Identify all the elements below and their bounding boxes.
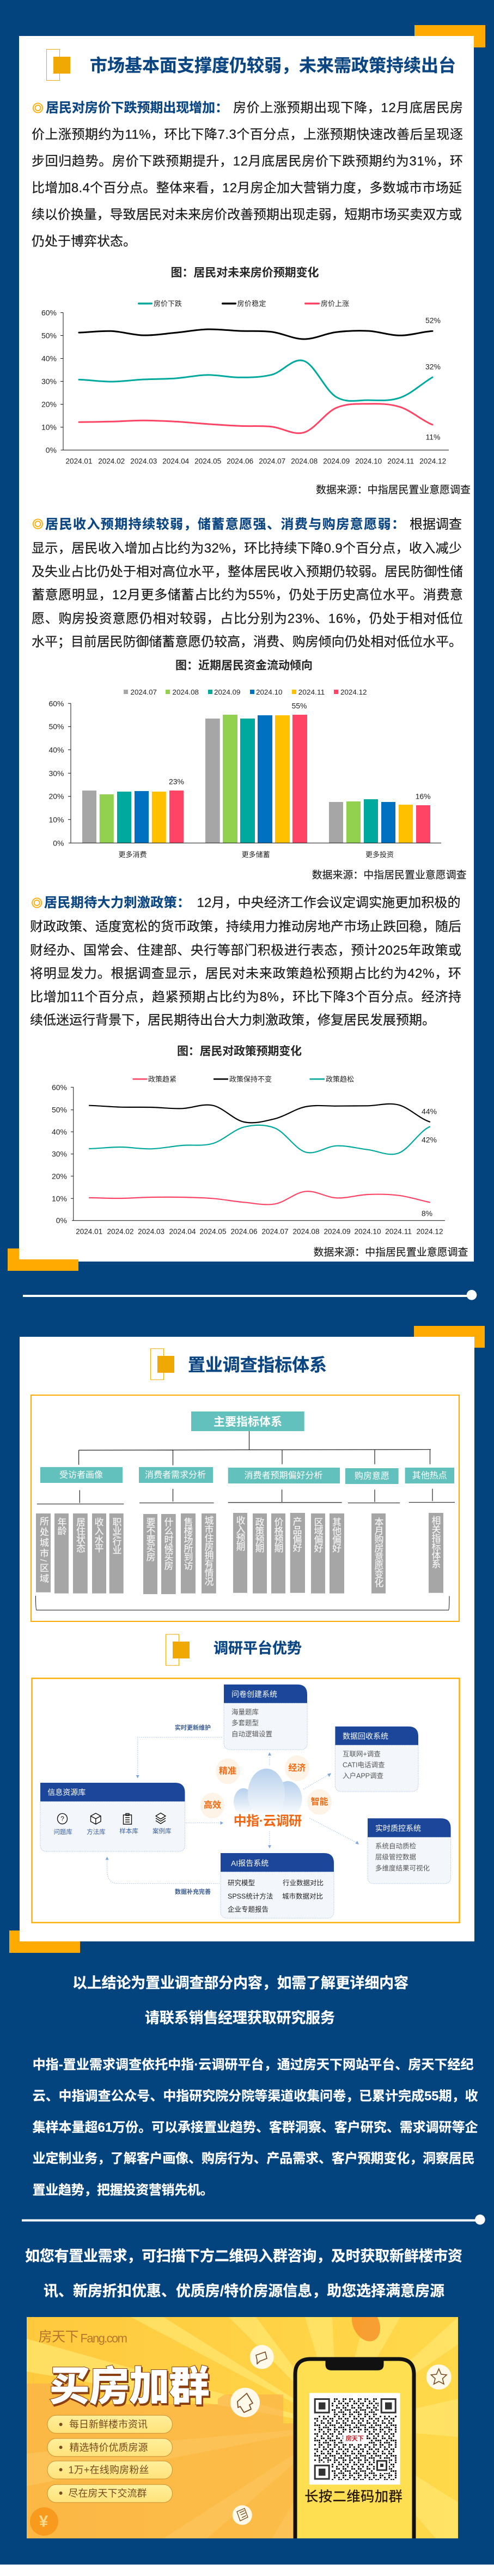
panel: platform diagram <box>32 1678 460 1922</box>
legend: 2024.07 <box>131 688 157 696</box>
callout: contact sales: 以上结论为置业调查部分内容，如需了解更详细内容 <box>72 1975 408 1992</box>
indicator bars: expectations and preferences <box>233 1513 344 1594</box>
bars: more investment <box>329 799 430 843</box>
line chart: policy expectations: 2024.03 <box>138 1227 164 1235</box>
bars: more savings <box>205 715 307 843</box>
pill: discounted homes <box>47 2439 172 2457</box>
line chart: house price expectations: 2024.11 <box>387 457 414 466</box>
card: data collection system: 入户APP调查 <box>343 1772 384 1780</box>
line chart: house price expectations: 10% <box>41 423 57 432</box>
arrow: questionnaire to library <box>136 1738 222 1778</box>
icon: star <box>426 2364 452 2390</box>
card: questionnaire system: 多套题型 <box>231 1718 259 1727</box>
icon: house <box>230 2388 260 2417</box>
logo: Fang.com <box>81 2331 127 2345</box>
card: information library: 案例库 <box>153 1827 172 1835</box>
icon: cloud <box>234 1769 302 1819</box>
line chart: policy expectations: 10% <box>52 1194 67 1203</box>
card: quality control system: 多维度结果可视化 <box>375 1864 430 1872</box>
indicator bars: expectations and preferences: 收入预期 <box>234 1516 245 1551</box>
indicator bars: demand analysis: 城市住房拥有情况 <box>203 1516 214 1586</box>
arrow: cloud to quality control <box>309 1818 359 1844</box>
panel: indicator tree <box>31 1395 459 1621</box>
background rays <box>27 2317 458 2538</box>
line chart: policy expectations: 2024.11 <box>385 1227 412 1235</box>
pill: daily news <box>47 2415 172 2433</box>
bar chart: fund flow: 10% <box>48 815 64 824</box>
label: realtime update: 实时更新维护 <box>175 1723 211 1731</box>
text block: policy stimulus: 续低迷运行背景下，居民期待出台大力刺激政策，修复居民发展预期。 <box>30 1013 435 1028</box>
text block: house price expectations: 仍处于博弈状态。 <box>32 234 136 249</box>
pill: daily news: 每日新鲜楼市资讯 <box>69 2419 148 2430</box>
card: questionnaire system <box>224 1685 307 1749</box>
root node <box>191 1411 304 1431</box>
text block: policy stimulus: 财经办、国常会、住建部、央行等部门积极进行表态，预计2025年政策或 <box>30 943 461 958</box>
text block: policy stimulus: 比增加11个百分点，趋紧预期占比约为8%，环比下降3个百分点。经济持 <box>30 990 461 1004</box>
category: respondent profile <box>40 1467 123 1483</box>
category: demand analysis: 消费者需求分析 <box>145 1470 206 1480</box>
line chart: policy expectations: 2024.04 <box>169 1227 196 1235</box>
text block: house price expectations: 步回归趋势。房价下跌预期提升，12月底居民房价下跌预期约为31%，环 <box>32 154 463 169</box>
legend: 政策保持不变 <box>229 1075 272 1083</box>
text block: service intro: 集样本量超61万份。可以承接置业趋势、客群洞察、客户研究、需求调研等企 <box>33 2120 478 2135</box>
bubble: economical: 经济 <box>288 1763 306 1773</box>
building silhouettes <box>27 2384 294 2538</box>
QR code: 房天下 <box>345 2434 364 2442</box>
card: data collection system: CATI电话调查 <box>343 1761 385 1769</box>
card: data collection system: 数据回收系统 <box>343 1732 388 1740</box>
legend: 2024.09 <box>214 688 241 696</box>
phone <box>295 2359 414 2546</box>
legend <box>138 300 349 307</box>
line chart: house price expectations: 40% <box>41 354 57 363</box>
logo <box>39 2330 127 2345</box>
indicator bars: expectations and preferences: 区域偏好 <box>313 1517 323 1553</box>
line chart: policy expectations: 8% <box>422 1209 432 1217</box>
chart title: fund flow: 图：近期居民资金流动倾向 <box>175 659 313 672</box>
line chart: policy expectations: 20% <box>52 1172 67 1180</box>
line chart: policy expectations: 60% <box>52 1083 67 1091</box>
category: expectations and preferences <box>228 1468 340 1483</box>
indicator bar: other hotspots <box>429 1513 443 1593</box>
indicator bars: demand analysis: 什么时候买房 <box>162 1517 173 1570</box>
label: data supplement: 数据补充完善 <box>175 1887 211 1895</box>
line chart: house price expectations: 2024.06 <box>227 457 253 466</box>
indicator bars: demand analysis: 售楼场所到访 <box>182 1517 193 1570</box>
icon: sample clipboard <box>123 1813 132 1824</box>
indicator bars: expectations and preferences: 产品偏好 <box>291 1517 302 1552</box>
line chart: policy expectations: 30% <box>52 1150 67 1159</box>
line chart: policy expectations: 50% <box>52 1106 67 1114</box>
line chart: house price expectations: 30% <box>41 377 57 386</box>
line chart: policy expectations: 2024.10 <box>354 1227 381 1235</box>
arrow: cloud to data collection <box>303 1773 331 1789</box>
subheading: 居民期待大力刺激政策： <box>44 895 190 910</box>
source note: 数据来源：中指居民置业意愿调查 <box>312 869 467 881</box>
bar chart: fund flow: 更多储蓄 <box>242 850 270 859</box>
panel: market fundamentals <box>8 25 485 1271</box>
heading: platform advantages: 调研平台优势 <box>214 1639 302 1656</box>
bar chart: fund flow: 50% <box>48 722 64 731</box>
title: 市场基本面支撑度仍较弱，未来需政策持续出台 <box>90 56 456 75</box>
bubble: efficient <box>200 1793 224 1818</box>
indicator bars: respondent profile: 居住状态 <box>75 1517 85 1553</box>
panel: survey system <box>9 1326 485 1953</box>
logo: 房天下 <box>39 2330 79 2345</box>
line chart: policy expectations: 0% <box>56 1216 67 1225</box>
QR code <box>309 2393 400 2484</box>
legend: 2024.10 <box>256 688 282 696</box>
card: AI report system: SPSS统计方法 <box>228 1892 273 1900</box>
legend: 政策趋松 <box>326 1075 354 1083</box>
banner heading: 买房加群 <box>49 2363 210 2409</box>
bar chart: fund flow: 16% <box>416 792 431 800</box>
arrow: cloud to questionnaire <box>268 1752 271 1765</box>
source note: 数据来源：中指居民置业意愿调查 <box>316 484 471 496</box>
pill: online fans: 1万+在线购房粉丝 <box>69 2464 149 2475</box>
card: AI report system: 研究模型 <box>228 1879 255 1887</box>
line chart: policy expectations: 2024.06 <box>231 1227 258 1235</box>
icon: title marker <box>166 1634 190 1666</box>
indicator bars: expectations and preferences: 其他偏好 <box>331 1517 341 1553</box>
bar chart: fund flow: 55% <box>291 701 307 710</box>
legend: 2024.08 <box>172 688 199 696</box>
line chart: policy expectations: 2024.02 <box>107 1227 134 1235</box>
icon: bullet ring <box>33 519 42 529</box>
indicator bars: respondent profile: 所处城市/区域 <box>38 1517 49 1584</box>
root node: 主要指标体系 <box>214 1416 282 1428</box>
category: purchase intention <box>345 1468 399 1484</box>
line chart: house price expectations: 2024.12 <box>419 457 446 466</box>
icon: bullet ring <box>33 103 42 113</box>
text block: policy stimulus: 将明显发力。根据调查显示，居民对未来政策趋松预期占比约为42%，环 <box>30 966 461 981</box>
bar chart: fund flow: 20% <box>48 792 64 801</box>
category: expectations and preferences: 消费者预期偏好分析 <box>244 1471 323 1481</box>
line chart: house price expectations: 2024.10 <box>355 457 382 466</box>
text block: income expectations: 水平；目前居民防御储蓄意愿仍较高，消费、购房倾向仍处相对低位水平。 <box>32 635 462 649</box>
legend: 2024.12 <box>340 688 367 696</box>
indicator bars: demand analysis <box>143 1513 216 1594</box>
card: information library: 问题库 <box>53 1828 72 1836</box>
text block: house price expectations: 房价上涨预期出现下降，12月底居民房 <box>233 100 463 116</box>
scan caption: 长按二维码加群 <box>304 2489 402 2505</box>
card: questionnaire system: 自动逻辑设置 <box>231 1730 272 1738</box>
category: purchase intention: 购房意愿 <box>355 1471 389 1481</box>
line chart: house price expectations: 2024.02 <box>98 457 125 466</box>
card: data collection system <box>335 1727 418 1791</box>
text block: income expectations: 根据调查 <box>410 517 462 532</box>
line chart: house price expectations: 2024.09 <box>323 457 350 466</box>
callout: join group <box>25 2247 462 2300</box>
chart title: expectations: 图：居民对未来房价预期变化 <box>171 266 319 279</box>
line chart: policy expectations: 2024.08 <box>293 1227 320 1235</box>
line chart: house price expectations: 2024.03 <box>130 457 157 466</box>
banner: buy house group <box>27 2301 458 2546</box>
icon: chat bubble <box>250 2345 274 2369</box>
card: quality control system: 层级管控数据 <box>375 1853 416 1861</box>
bar chart: fund flow: 60% <box>48 699 64 708</box>
icon: document <box>233 2505 252 2525</box>
indicator bars: respondent profile: 收入水平 <box>93 1517 103 1553</box>
bubble: precise <box>216 1759 240 1784</box>
card: AI report system: AI报告系统 <box>231 1859 269 1867</box>
card: information library: 样本库 <box>119 1827 138 1835</box>
line chart: house price expectations: 2024.04 <box>162 457 189 466</box>
text block: house price expectations: 续以价换量，导致居民对未来房价改善预期出现走弱，短期市场买卖双方或 <box>32 207 462 222</box>
bubble: intelligent: 智能 <box>310 1796 328 1807</box>
line chart: house price expectations: 11% <box>426 432 440 441</box>
category: respondent profile: 受访者画像 <box>59 1470 103 1480</box>
heading: survey indicators: 置业调查指标体系 <box>188 1355 327 1374</box>
line chart: house price expectations <box>41 300 449 466</box>
card: information library: 方法库 <box>87 1828 106 1836</box>
icon: question bank: ? <box>60 1815 64 1823</box>
coin bottom <box>30 2507 58 2536</box>
card: quality control system <box>368 1818 451 1884</box>
icon: title marker <box>47 49 70 81</box>
divider <box>22 2215 485 2225</box>
text block: policy stimulus: 12月，中央经济工作会议定调实施更加积极的 <box>197 895 461 910</box>
category: other hotspots: 其他热点 <box>412 1471 447 1481</box>
card: information library: 信息资源库 <box>47 1788 86 1797</box>
arrow: cloud to AI report <box>268 1831 271 1848</box>
indicator bar: other hotspots: 相关指标体系 <box>430 1516 441 1568</box>
line chart: house price expectations: 32% <box>425 362 441 371</box>
indicator bars: respondent profile: 职业/行业 <box>111 1517 121 1554</box>
bubble: precise: 精准 <box>219 1765 236 1776</box>
legend: 房价下跌 <box>154 300 182 307</box>
bubble: economical <box>285 1755 309 1781</box>
bar chart: fund flow: 更多消费 <box>119 850 147 859</box>
line chart: house price expectations: 60% <box>41 309 57 317</box>
bar chart: fund flow: 30% <box>48 769 64 777</box>
divider <box>23 1290 477 1300</box>
indicator bars: expectations and preferences: 政策预期 <box>254 1517 264 1553</box>
indicator bars: demand analysis: 要不要买房 <box>145 1517 155 1561</box>
source note: 数据来源：中指居民置业意愿调查 <box>314 1246 468 1258</box>
callout: contact sales <box>72 1975 408 2026</box>
line chart: house price expectations: 2024.08 <box>291 457 318 466</box>
card: AI report system: 城市数据对比 <box>282 1892 323 1900</box>
text block: house price expectations: 价上涨预期约为11%，环比下降7.3个百分点，上涨预期快速改善后呈现逐 <box>32 128 463 142</box>
bar chart: fund flow: 23% <box>169 777 184 786</box>
legend: 房价上涨 <box>321 300 349 307</box>
pill: online fans <box>47 2461 172 2479</box>
category: other hotspots <box>405 1468 454 1483</box>
card: questionnaire system: 问卷创建系统 <box>231 1690 277 1699</box>
indicator bar: purchase intention: 本月购房意愿变化 <box>373 1517 383 1588</box>
line chart: policy expectations: 2024.01 <box>76 1227 102 1235</box>
pill: exchange group <box>47 2484 172 2502</box>
text block: service intro <box>33 2057 478 2198</box>
card: AI report system: 企业专题报告 <box>228 1905 269 1913</box>
pill: discounted homes: 精选特价优质房源 <box>70 2442 148 2453</box>
legend <box>124 688 367 696</box>
line chart: house price expectations: 0% <box>46 446 57 455</box>
text block: income expectations: 愿、购房投资意愿仍相对较弱，占比分别为23%、16%，仍处于相对低位 <box>32 612 463 626</box>
text block: house price expectations <box>32 100 463 249</box>
icon: case layers <box>156 1813 166 1824</box>
bars: more consumption <box>82 791 184 843</box>
card: questionnaire system: 海量题库 <box>231 1708 259 1716</box>
bottom bracket <box>35 1596 449 1610</box>
pill: exchange group: 尽在房天下交流群 <box>69 2488 147 2499</box>
icon: method cube <box>90 1813 101 1824</box>
line chart: policy expectations: 2024.09 <box>324 1227 351 1235</box>
icon: title marker <box>150 1349 174 1380</box>
chart title: policy expectations: 图：居民对政策预期变化 <box>177 1045 302 1058</box>
bar chart: fund flow: 0% <box>53 838 64 847</box>
icon: bullet ring <box>32 898 41 908</box>
bar chart: fund flow: 更多投资 <box>365 850 394 859</box>
indicator bars: respondent profile: 年龄 <box>56 1517 66 1535</box>
legend <box>133 1075 354 1083</box>
text block: income expectations: 及失业占比仍处于相对高位水平，整体居民收入预期仍较弱。居民防御性储 <box>32 565 463 579</box>
bubble: intelligent <box>307 1789 332 1815</box>
subheading: 居民对房价下跌预期出现增加： <box>46 100 228 116</box>
line chart: policy expectations: 42% <box>422 1135 437 1144</box>
callout: join group: 如您有置业需求，可扫描下方二维码入群咨询，及时获取新鲜楼市资 <box>25 2247 462 2264</box>
indicator bars: respondent profile <box>36 1513 124 1594</box>
arrow: library to cloud <box>186 1821 223 1825</box>
text block: service intro: 中指-置业需求调查依托中指·云调研平台，通过房天下网站平台、房天下经纪 <box>33 2057 474 2072</box>
card: data collection system: 互联网+调查 <box>343 1751 381 1758</box>
text block: income expectations: 显示，居民收入增加占比约为32%，环比持续下降0.9个百分点，收入减少 <box>32 541 462 556</box>
bar chart: fund flow: 40% <box>48 745 64 754</box>
text block: service intro: 业定制业务，了解客户画像、购房行为、产品需求、客户预期变化，洞察居民 <box>33 2151 475 2166</box>
indicator bars: expectations and preferences: 价格预期 <box>272 1517 283 1553</box>
line chart: house price expectations: 20% <box>41 400 57 409</box>
callout: join group: 讯、新房折扣优惠、优质房/特价房源信息，助您选择满意房源 <box>44 2283 444 2300</box>
line chart: house price expectations: 2024.05 <box>194 457 221 466</box>
card: AI report system: 行业数据对比 <box>283 1879 324 1887</box>
bubble: efficient: 高效 <box>204 1800 221 1810</box>
text block: policy stimulus <box>30 895 461 1028</box>
coin bottom: ¥ <box>39 2512 48 2531</box>
line chart: house price expectations: 2024.01 <box>65 457 93 466</box>
tree connectors <box>37 1431 455 1504</box>
card: AI report system <box>221 1853 334 1918</box>
text block: income expectations <box>32 517 463 649</box>
icon: question bank <box>58 1813 68 1824</box>
category: demand analysis <box>139 1467 213 1483</box>
line chart: policy expectations <box>52 1075 445 1235</box>
card: quality control system: 实时质控系统 <box>375 1824 421 1833</box>
line chart: house price expectations: 2024.07 <box>259 457 285 466</box>
card: quality control system: 系统自动质检 <box>375 1842 417 1850</box>
text block: income expectations: 蓄意愿明显，12月更多储蓄占比约为55%，仍处于历史高位水平。消费意 <box>32 588 463 602</box>
text block: service intro: 置业趋势，把握投资营销先机。 <box>33 2183 214 2198</box>
line chart: policy expectations: 2024.07 <box>261 1227 289 1235</box>
text block: service intro: 云、中指调查公众号、中指研究院分院等渠道收集问卷，已累计完成55期，收 <box>33 2088 478 2103</box>
line chart: policy expectations: 2024.05 <box>199 1227 227 1235</box>
line chart: house price expectations: 52% <box>425 316 441 324</box>
bar chart: fund flow <box>48 688 441 859</box>
text block: policy stimulus: 财政政策、适度宽松的货币政策，持续用力推动房地产市场止跌回稳，随后 <box>30 919 461 934</box>
legend: 房价稳定 <box>237 300 266 307</box>
legend: 2024.11 <box>298 688 325 696</box>
card: information library <box>40 1783 185 1851</box>
callout: contact sales: 请联系销售经理获取研究服务 <box>145 2010 335 2026</box>
line chart: house price expectations: 50% <box>41 331 57 340</box>
line chart: policy expectations: 40% <box>52 1127 67 1136</box>
arrow: AI report to library <box>106 1857 219 1884</box>
legend: 政策趋紧 <box>148 1075 176 1083</box>
indicator bar: purchase intention <box>371 1513 386 1594</box>
subheading: 居民收入预期持续较弱，储蓄意愿强、消费与购房意愿弱： <box>45 517 405 532</box>
coin top <box>352 2317 380 2341</box>
line chart: policy expectations: 2024.12 <box>416 1227 443 1235</box>
text block: house price expectations: 比增加8.4个百分点。整体来看，12月房企加大营销力度，多数城市市场延 <box>32 181 462 195</box>
line chart: policy expectations: 44% <box>422 1107 437 1115</box>
platform name: 中指·云调研 <box>234 1814 302 1829</box>
